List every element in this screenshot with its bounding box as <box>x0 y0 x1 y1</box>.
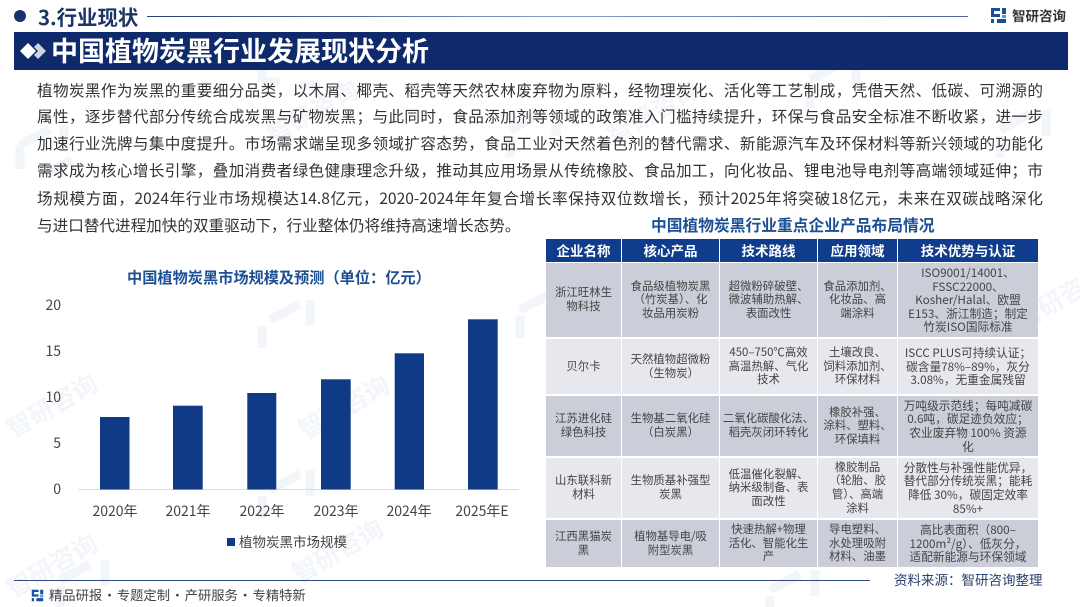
y axis labels: 5 <box>53 433 61 453</box>
row 2: certification <box>898 339 1038 394</box>
row 2: route: 技术 <box>757 371 780 387</box>
row 5: company: 江西黑猫炭 <box>555 528 612 544</box>
table header: 技术路线: 技术路线 <box>742 240 796 260</box>
row 4: route: 面改性 <box>751 493 786 509</box>
row 1: certification: Kosher/Halal、欧盟 <box>915 291 1021 308</box>
row 1: product <box>622 263 719 337</box>
y axis labels <box>45 295 61 499</box>
row 3: certification <box>898 396 1038 456</box>
icon: brand mark <box>991 8 1006 23</box>
row 1: certification: ISO9001/14001、 <box>921 264 1015 281</box>
table header: 核心产品 <box>622 239 719 262</box>
row 5: product <box>622 520 719 567</box>
brand logo: 智研咨询 <box>991 5 1066 25</box>
row 3: application: 环保填料 <box>835 431 880 447</box>
row 5: application: 材料、油墨 <box>829 548 886 564</box>
row 1: certification: 竹炭ISO国际标准 <box>923 318 1013 335</box>
row 3: certification: 农业废弃物 100% 资源 <box>909 424 1027 441</box>
row 4: product <box>622 458 719 518</box>
row 5: product: 附型炭黑 <box>648 542 693 558</box>
row 5: route: 活化、智能化生 <box>729 535 808 551</box>
table header: 企业名称: 企业名称 <box>556 240 610 260</box>
row 1: route: 微波辅助热解、 <box>729 291 808 307</box>
row 4: application: （轮胎、胶 <box>829 472 886 488</box>
row 4: certification: 85%+ <box>953 500 983 517</box>
source note: 资料来源：智研咨询整理 <box>894 569 1042 589</box>
row 5: certification <box>898 520 1038 567</box>
table header: 技术路线 <box>720 239 817 262</box>
row 2: company <box>546 339 621 394</box>
row 4: certification: 替代部分传统炭黑；能耗 <box>904 472 1032 489</box>
row 5: certification: 高比表面积（800– <box>920 521 1016 538</box>
row 3: certification: 0.6吨，碳足迹负效应； <box>907 410 1029 427</box>
row 1: company: 物科技 <box>566 298 601 314</box>
legend: 植物炭黑市场规模 <box>239 531 347 551</box>
row 2: application: 环保材料 <box>835 371 880 387</box>
footer rule <box>14 580 870 581</box>
row 4: route: 纳米级制备、表 <box>729 479 808 495</box>
row 5: application <box>818 520 897 567</box>
row 4: route <box>720 458 817 518</box>
slogan text: 精品研报 · 专题定制 · 产研服务 · 专精特新 <box>49 585 306 604</box>
table title: 中国植物炭黑行业重点企业产品布局情况 <box>651 213 934 236</box>
row 5: route: 快速热解+物理 <box>731 521 806 537</box>
row 2: product: 天然植物超微粉 <box>631 351 710 367</box>
section bullet dot <box>14 10 26 22</box>
row 4: company <box>546 458 621 518</box>
row 2: product <box>622 339 719 394</box>
body paragraph: 属性，逐步替代部分传统合成炭黑与矿物炭黑；与此同时，食品添加剂等领域的政策准入门槛持续提升，环保与食品安全标准不断收紧，进一步 <box>37 105 1043 127</box>
row 3: route <box>720 396 817 456</box>
row 1: company <box>546 263 621 337</box>
bars <box>100 319 498 490</box>
row 1: product: （竹炭基）、化 <box>633 291 708 307</box>
y axis labels: 0 <box>53 479 61 499</box>
section header rule <box>147 16 968 17</box>
table header: 企业名称 <box>546 239 621 262</box>
footer slogan <box>32 585 306 604</box>
row 3: certification: 万吨级示范线；每吨减碳 <box>904 397 1032 414</box>
x axis labels: 2024年 <box>386 501 432 521</box>
row 4: certification <box>898 458 1038 518</box>
row 1: application: 端涂料 <box>840 305 875 321</box>
row 4: route: 低温催化裂解、 <box>729 466 808 482</box>
row 4: application <box>818 458 897 518</box>
y axis labels: 10 <box>45 387 61 407</box>
row 3: application: 涂料、塑料、 <box>823 417 892 433</box>
text: 智研咨询 <box>0 364 104 446</box>
body paragraph: 加速行业洗牌与集中度提升。市场需求端呈现多领域扩容态势，食品工业对天然着色剂的替代需求、新能源汽车及环保材料等新兴领域的功能化 <box>37 132 1043 154</box>
row 5: company: 黑 <box>578 542 589 558</box>
table header: 技术优势与认证: 技术优势与认证 <box>921 240 1015 260</box>
x axis labels: 2025年E <box>455 501 509 521</box>
body paragraph: 需求成为核心增长引擎，叠加消费者绿色健康理念升级，推动其应用场景从传统橡胶、食品加工，向化妆品、锂电池导电剂等高端领域延伸；市 <box>37 159 1043 181</box>
row 3: application <box>818 396 897 456</box>
y axis labels: 15 <box>45 341 61 361</box>
body paragraph: 与进口替代进程加快的双重驱动下，行业整体仍将维持高速增长态势。 <box>37 214 520 236</box>
axis baseline <box>78 488 519 490</box>
text: 智研咨询 <box>600 71 705 152</box>
row 4: application: 橡胶制品 <box>835 459 880 475</box>
row 2: product: （生物炭） <box>642 364 699 380</box>
section heading text: 3.行业现状 <box>38 1 138 31</box>
row 1: route <box>720 263 817 337</box>
row 5: certification: 1200m²/g）、低灰分， <box>910 535 1026 552</box>
text: 智研咨询 <box>0 524 104 606</box>
row 1: application: 食品添加剂、 <box>823 278 892 294</box>
x axis labels: 2022年 <box>239 501 285 521</box>
row 5: application: 水处理吸附 <box>829 535 886 551</box>
text: 智研咨询 <box>285 509 390 591</box>
row 4: company: 材料 <box>572 486 595 502</box>
row 1: certification: E153、浙江制造；制定 <box>908 305 1028 322</box>
section header: 3.行业现状 <box>14 1 968 31</box>
text: 智研咨询 <box>291 366 396 447</box>
text: 智研咨询 <box>260 71 365 152</box>
row 3: company: 绿色科技 <box>561 424 606 440</box>
row 2: company: 贝尔卡 <box>566 358 601 374</box>
row 2: certification: 碳含量78%–89%，灰分 <box>906 358 1030 375</box>
table header: 核心产品: 核心产品 <box>644 240 698 260</box>
y axis labels: 20 <box>45 295 61 315</box>
row 3: company <box>546 396 621 456</box>
row 2: route: 450–750℃高效 <box>729 344 808 360</box>
x axis labels: 2023年 <box>313 501 359 521</box>
row 4: product: 炭黑 <box>659 486 682 502</box>
row 3: company: 江苏进化硅 <box>555 410 612 426</box>
row 3: route: 二氧化碳酸化法、 <box>723 410 814 426</box>
bar chart: market size and forecast <box>45 266 519 551</box>
row 4: application: 管）、高端 <box>832 486 883 502</box>
row 5: company <box>546 520 621 567</box>
row 3: product <box>622 396 719 456</box>
row 5: route <box>720 520 817 567</box>
x axis labels <box>92 501 509 521</box>
row 3: application: 橡胶补强、 <box>829 404 886 420</box>
icon: footer brand mark <box>32 590 44 602</box>
row 4: company: 山东联科新 <box>555 472 612 488</box>
row 2: application: 土壤改良、 <box>829 344 886 360</box>
row 1: route: 表面改性 <box>746 305 791 321</box>
row 2: application: 饲料添加剂、 <box>823 358 892 374</box>
title banner <box>14 32 1068 70</box>
row 4: product: 生物质基补强型 <box>631 472 710 488</box>
main title: 中国植物炭黑行业发展现状分析 <box>51 30 429 69</box>
row 1: application: 化妆品、高 <box>829 291 886 307</box>
row 1: company: 浙江旺林生 <box>555 284 612 300</box>
chart title: 中国植物炭黑市场规模及预测（单位：亿元） <box>127 266 431 288</box>
body paragraph <box>37 79 1043 236</box>
row 3: route: 稻壳灰闭环转化 <box>729 424 808 440</box>
row 5: certification: 适配新能源与环保领域 <box>910 548 1026 565</box>
row 5: product: 植物基导电/吸 <box>634 528 707 544</box>
row 1: route: 超微粉碎破壁、 <box>729 278 808 294</box>
row 5: application: 导电塑料、 <box>829 521 886 537</box>
body paragraph: 场规模方面，2024年行业市场规模达14.8亿元，2020-2024年年复合增长率保持双位数增长，预计2025年将突破18亿元，未来在双碳战略深化 <box>37 187 1043 209</box>
row 3: certification: 化 <box>962 438 974 455</box>
icon: double diamond <box>20 43 46 59</box>
row 2: route <box>720 339 817 394</box>
row 1: certification: FSSC22000、 <box>932 278 1004 295</box>
brand name: 智研咨询 <box>1012 5 1066 25</box>
row 2: application <box>818 339 897 394</box>
row 3: product: 生物基二氧化硅 <box>631 410 710 426</box>
row 1: product: 妆品用炭粉 <box>642 305 699 321</box>
row 4: certification: 分散性与补强性能优异， <box>904 459 1032 476</box>
row 3: product: （白炭黑） <box>642 424 699 440</box>
x axis labels: 2021年 <box>165 501 211 521</box>
table header: 技术优势与认证 <box>898 239 1038 262</box>
row 4: application: 涂料 <box>846 500 869 516</box>
body paragraph: 植物炭黑作为炭黑的重要细分品类，以木屑、椰壳、稻壳等天然农林废弃物为原料，经物理炭化、活化等工艺制成，凭借天然、低碳、可溯源的 <box>37 79 1043 101</box>
x axis labels: 2020年 <box>92 501 138 521</box>
table header: 应用领域 <box>818 239 897 262</box>
row 5: route: 产 <box>763 548 774 564</box>
row 1: certification <box>898 263 1038 337</box>
row 2: route: 高温热解、气化 <box>729 358 808 374</box>
row 2: certification: ISCC PLUS可持续认证； <box>905 344 1031 361</box>
row 2: certification: 3.08%，无重金属残留 <box>910 371 1026 388</box>
table header: 应用领域: 应用领域 <box>830 240 884 260</box>
row 4: certification: 降低 30%，碳固定效率 <box>908 486 1028 503</box>
row 1: application <box>818 263 897 337</box>
row 1: product: 食品级植物炭黑 <box>631 278 710 294</box>
